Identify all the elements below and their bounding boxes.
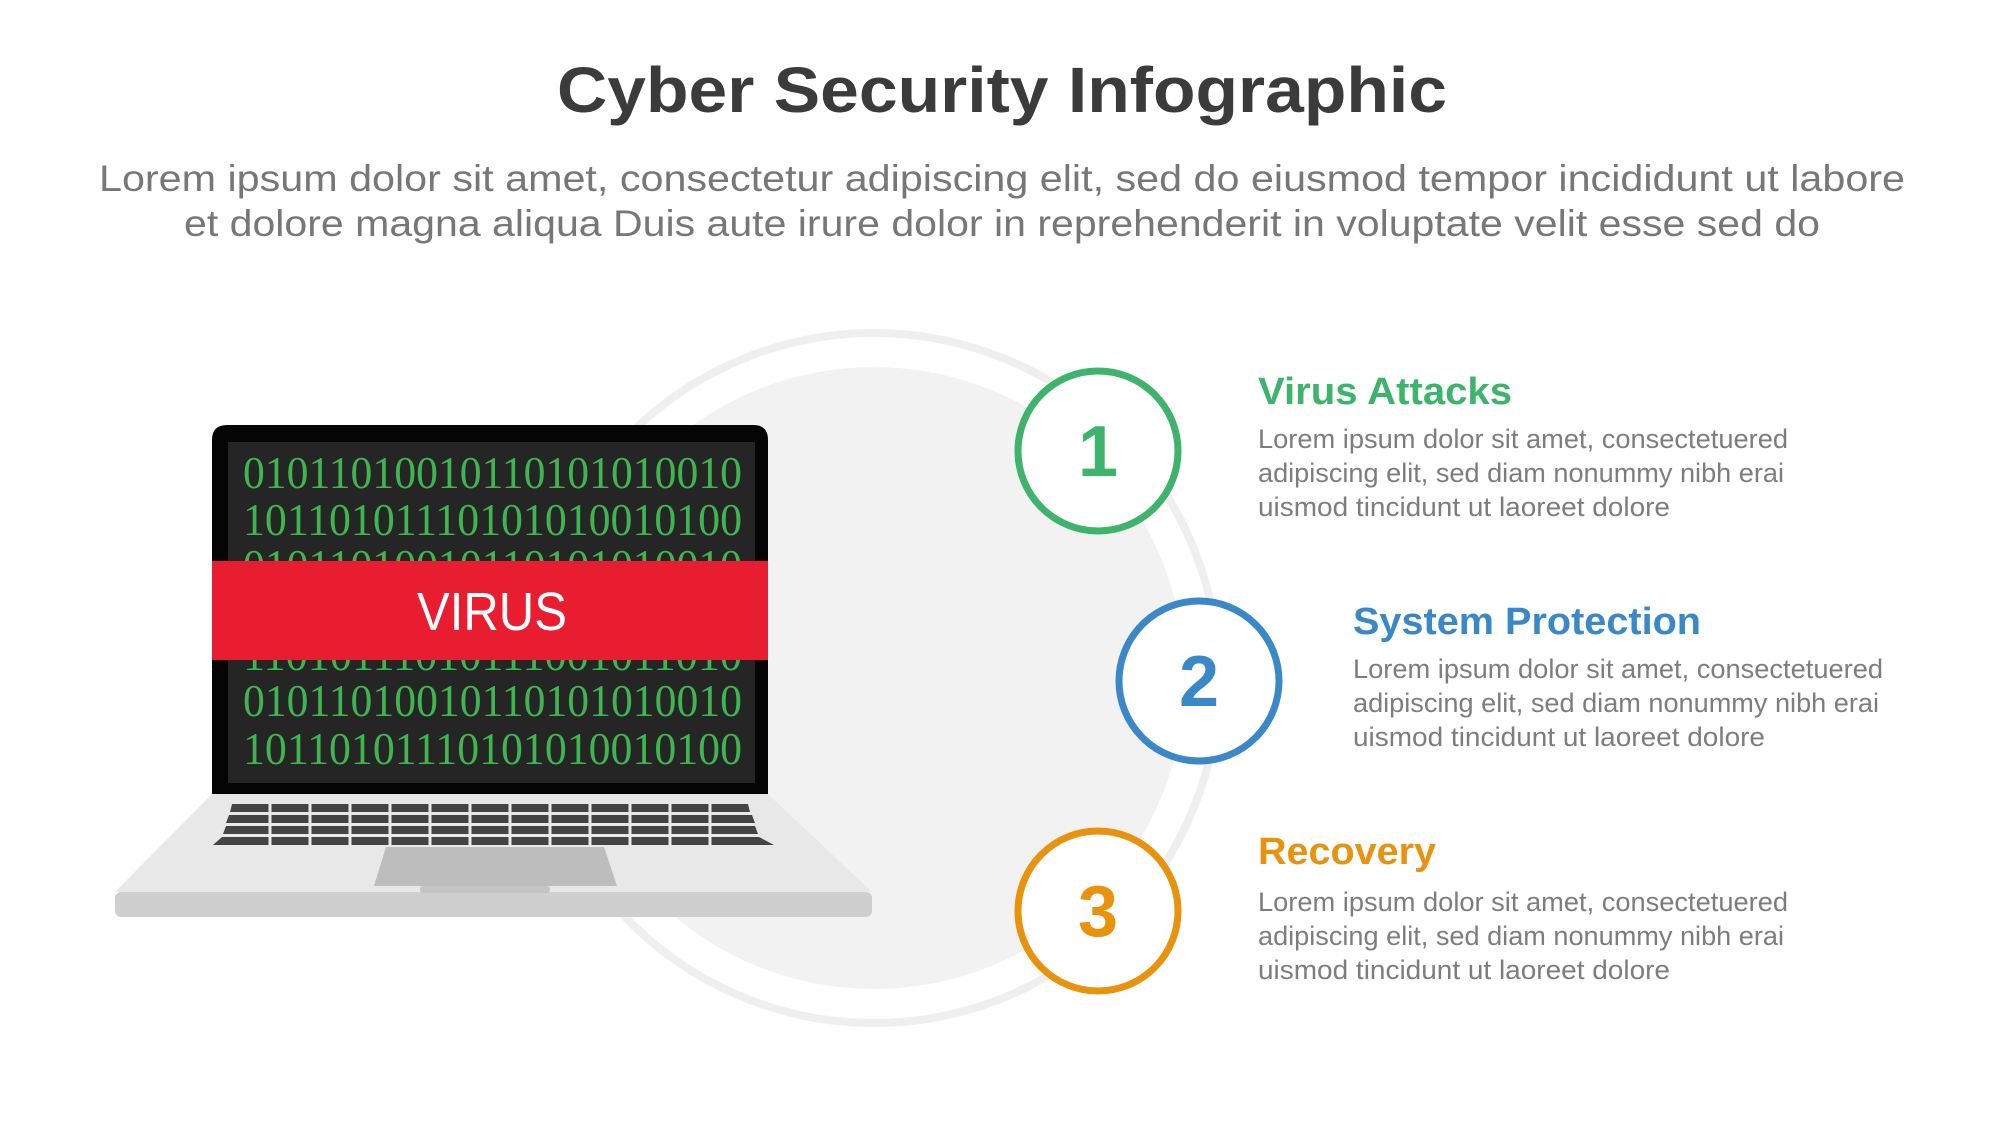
background circle [529,333,1219,1023]
step 2 text: adipiscing elit, sed diam nonummy nibh erai [1353,688,1879,718]
virus banner: VIRUS [417,582,567,642]
step 3 text [1258,831,1788,985]
step 3 text: uismod tincidunt ut laoreet dolore [1258,955,1670,985]
step 1 circle [1018,371,1178,531]
laptop screen: 10110101110101010010100 [243,494,742,545]
laptop [115,425,872,917]
step 3 text: Recovery [1258,831,1436,873]
step 3 circle: 3 [1078,872,1118,952]
step 2 text: Lorem ipsum dolor sit amet, consectetuered [1353,654,1883,684]
step 2 text: uismod tincidunt ut laoreet dolore [1353,722,1765,752]
step 3 circle [1018,831,1178,991]
step 1 text: Virus Attacks [1258,371,1512,413]
title: Cyber Security Infographic [557,54,1447,126]
step 2 text [1353,601,1883,752]
step 1 text: adipiscing elit, sed diam nonummy nibh erai [1258,458,1784,488]
subtitle: et dolore magna aliqua Duis aute irure dolor in reprehenderit in voluptate velit esse sed do [184,203,1820,244]
laptop screen [212,425,768,794]
laptop base [115,794,872,917]
laptop screen: 01011010010110101010010 [243,447,742,498]
subtitle: Lorem ipsum dolor sit amet, consectetur adipiscing elit, sed do eiusmod tempor incididunt ut labore [99,158,1905,199]
step 1 text [1258,371,1788,522]
step 2 circle: 2 [1179,642,1219,722]
laptop screen: 11010111010111001011010 [243,629,742,680]
subtitle [99,158,1905,244]
virus banner [212,561,768,660]
laptop screen: 01011010010110101010010 [243,540,742,591]
step 3 text: adipiscing elit, sed diam nonummy nibh erai [1258,921,1784,951]
laptop screen: 10110101110101010010100 [243,723,742,774]
step 1 text: Lorem ipsum dolor sit amet, consectetuered [1258,424,1788,454]
step 2 text: System Protection [1353,601,1701,643]
step 3 text: Lorem ipsum dolor sit amet, consectetuered [1258,887,1788,917]
step 1 circle: 1 [1078,412,1118,492]
step 2 circle [1119,601,1279,761]
step 1 text: uismod tincidunt ut laoreet dolore [1258,492,1670,522]
laptop screen: 01011010010110101010010 [243,675,742,726]
